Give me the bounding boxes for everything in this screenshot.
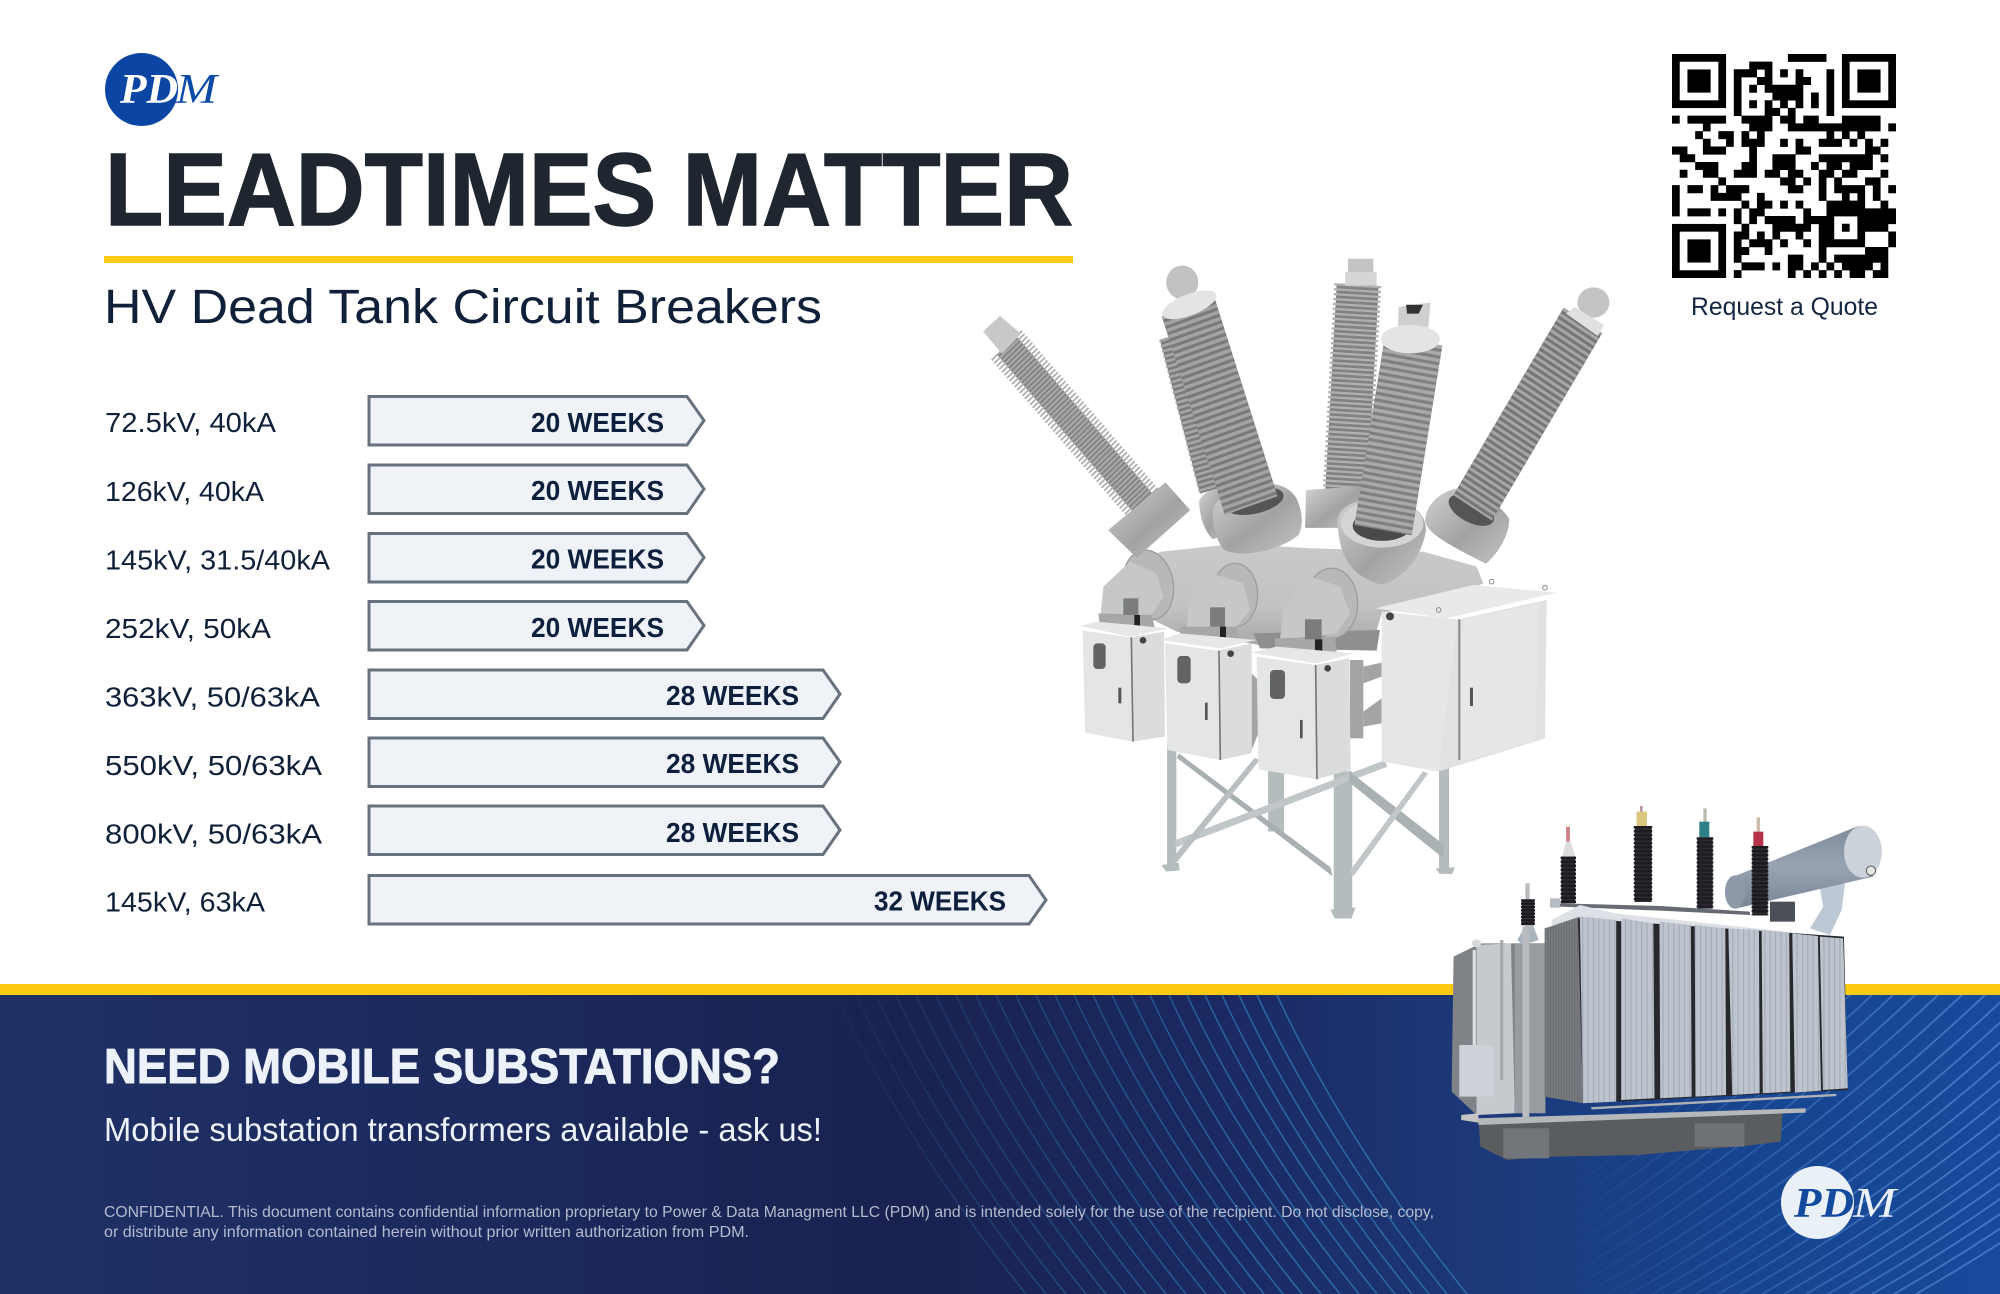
QR code — [1672, 58, 1896, 274]
image: dead tank circuit breaker — [983, 259, 1609, 919]
right insulator — [1425, 287, 1609, 564]
bracket behind cabinet 3 — [1252, 660, 1382, 750]
title: LEADTIMES MATTER — [105, 132, 1073, 247]
row: 145kV 31.5/40kA: 145kV, 31.5/40kA — [105, 544, 330, 576]
logo: PDM bottom: PD — [1793, 1181, 1854, 1227]
front insulator 2 — [1159, 265, 1302, 553]
confidentiality notice: or distribute any information contained herein without prior written authorization from PDM. — [104, 1224, 749, 1241]
confidentiality notice — [104, 1204, 1434, 1241]
row: 550kV: 550kV, 50/63kA — [105, 750, 322, 781]
banner accent stripe — [0, 984, 2000, 995]
row: 550kV: 28 WEEKS — [666, 748, 799, 779]
bushing 5 — [1752, 817, 1768, 915]
row: 800kV — [105, 806, 840, 854]
lead time chart — [105, 396, 1046, 924]
large cabinet — [1375, 579, 1557, 772]
row: 145kV 63kA: 145kV, 63kA — [105, 886, 265, 918]
row: 363kV: 28 WEEKS — [666, 680, 799, 711]
row: 145kV 31.5/40kA — [105, 534, 704, 582]
row: 800kV: 28 WEEKS — [666, 817, 799, 848]
mechanisms and cabinets — [1080, 579, 1557, 779]
row: 72.5kV: 20 WEEKS — [531, 407, 664, 438]
transformer body — [1452, 917, 1848, 1160]
row: 126kV — [105, 465, 704, 514]
row: 252kV: 20 WEEKS — [531, 612, 664, 643]
row: 126kV: 20 WEEKS — [531, 475, 664, 506]
row: 126kV: 126kV, 40kA — [105, 476, 264, 507]
row: 145kV 63kA: 32 WEEKS — [874, 886, 1006, 916]
tank — [1100, 544, 1483, 651]
subtitle: HV Dead Tank Circuit Breakers — [104, 281, 822, 334]
row: 252kV — [105, 602, 704, 650]
operating mechanisms — [1098, 598, 1337, 655]
row: 72.5kV — [105, 396, 704, 445]
banner heading: NEED MOBILE SUBSTATIONS? — [104, 1040, 780, 1094]
front insulator 4 — [1338, 302, 1440, 585]
base frame — [1461, 1095, 1836, 1160]
small cabinet 3 — [1251, 647, 1353, 779]
tank body — [1452, 917, 1848, 1128]
row: 363kV — [105, 670, 840, 718]
bushing 2 — [1561, 827, 1575, 903]
row: 363kV: 363kV, 50/63kA — [105, 682, 320, 712]
small cabinet 2 — [1160, 633, 1257, 760]
image: power transformer — [1452, 806, 1882, 1160]
left insulator — [983, 316, 1190, 558]
banner subheading: Mobile substation transformers available - ask us! — [104, 1111, 822, 1148]
row: 72.5kV: 72.5kV, 40kA — [105, 407, 276, 438]
radiators — [1580, 917, 1848, 1103]
title underline — [104, 256, 1073, 263]
bushing 3 — [1635, 806, 1652, 902]
panel: bottom banner — [0, 995, 2000, 1294]
row: 252kV: 252kV, 50kA — [105, 613, 271, 644]
small cabinet 1 — [1080, 622, 1168, 742]
small bushing — [1517, 883, 1539, 945]
row: 145kV 63kA — [105, 876, 1046, 924]
conservator tank — [1725, 826, 1882, 935]
bushing 4 — [1697, 808, 1713, 909]
confidentiality notice: CONFIDENTIAL. This document contains confidential information proprietary to Power & Data Managment LLC (PDM) and is intended solely for the use of the recipient. Do not disclose, copy, — [104, 1204, 1434, 1221]
logo: PDM top: PD — [119, 67, 178, 113]
back insulators — [1173, 259, 1377, 539]
top rail — [1550, 898, 1833, 937]
row: 145kV 31.5/40kA: 20 WEEKS — [531, 544, 664, 574]
logo: PDM top — [105, 53, 219, 126]
row: 550kV — [105, 738, 840, 786]
conservator tank and bushings — [1517, 806, 1882, 945]
row: 800kV: 800kV, 50/63kA — [105, 818, 322, 850]
logo: PDM top: M — [175, 67, 219, 113]
support legs — [1161, 744, 1455, 919]
logo: PDM bottom — [1781, 1166, 1898, 1239]
logo: PDM bottom: M — [1852, 1181, 1898, 1227]
QR caption: Request a Quote — [1691, 293, 1878, 321]
